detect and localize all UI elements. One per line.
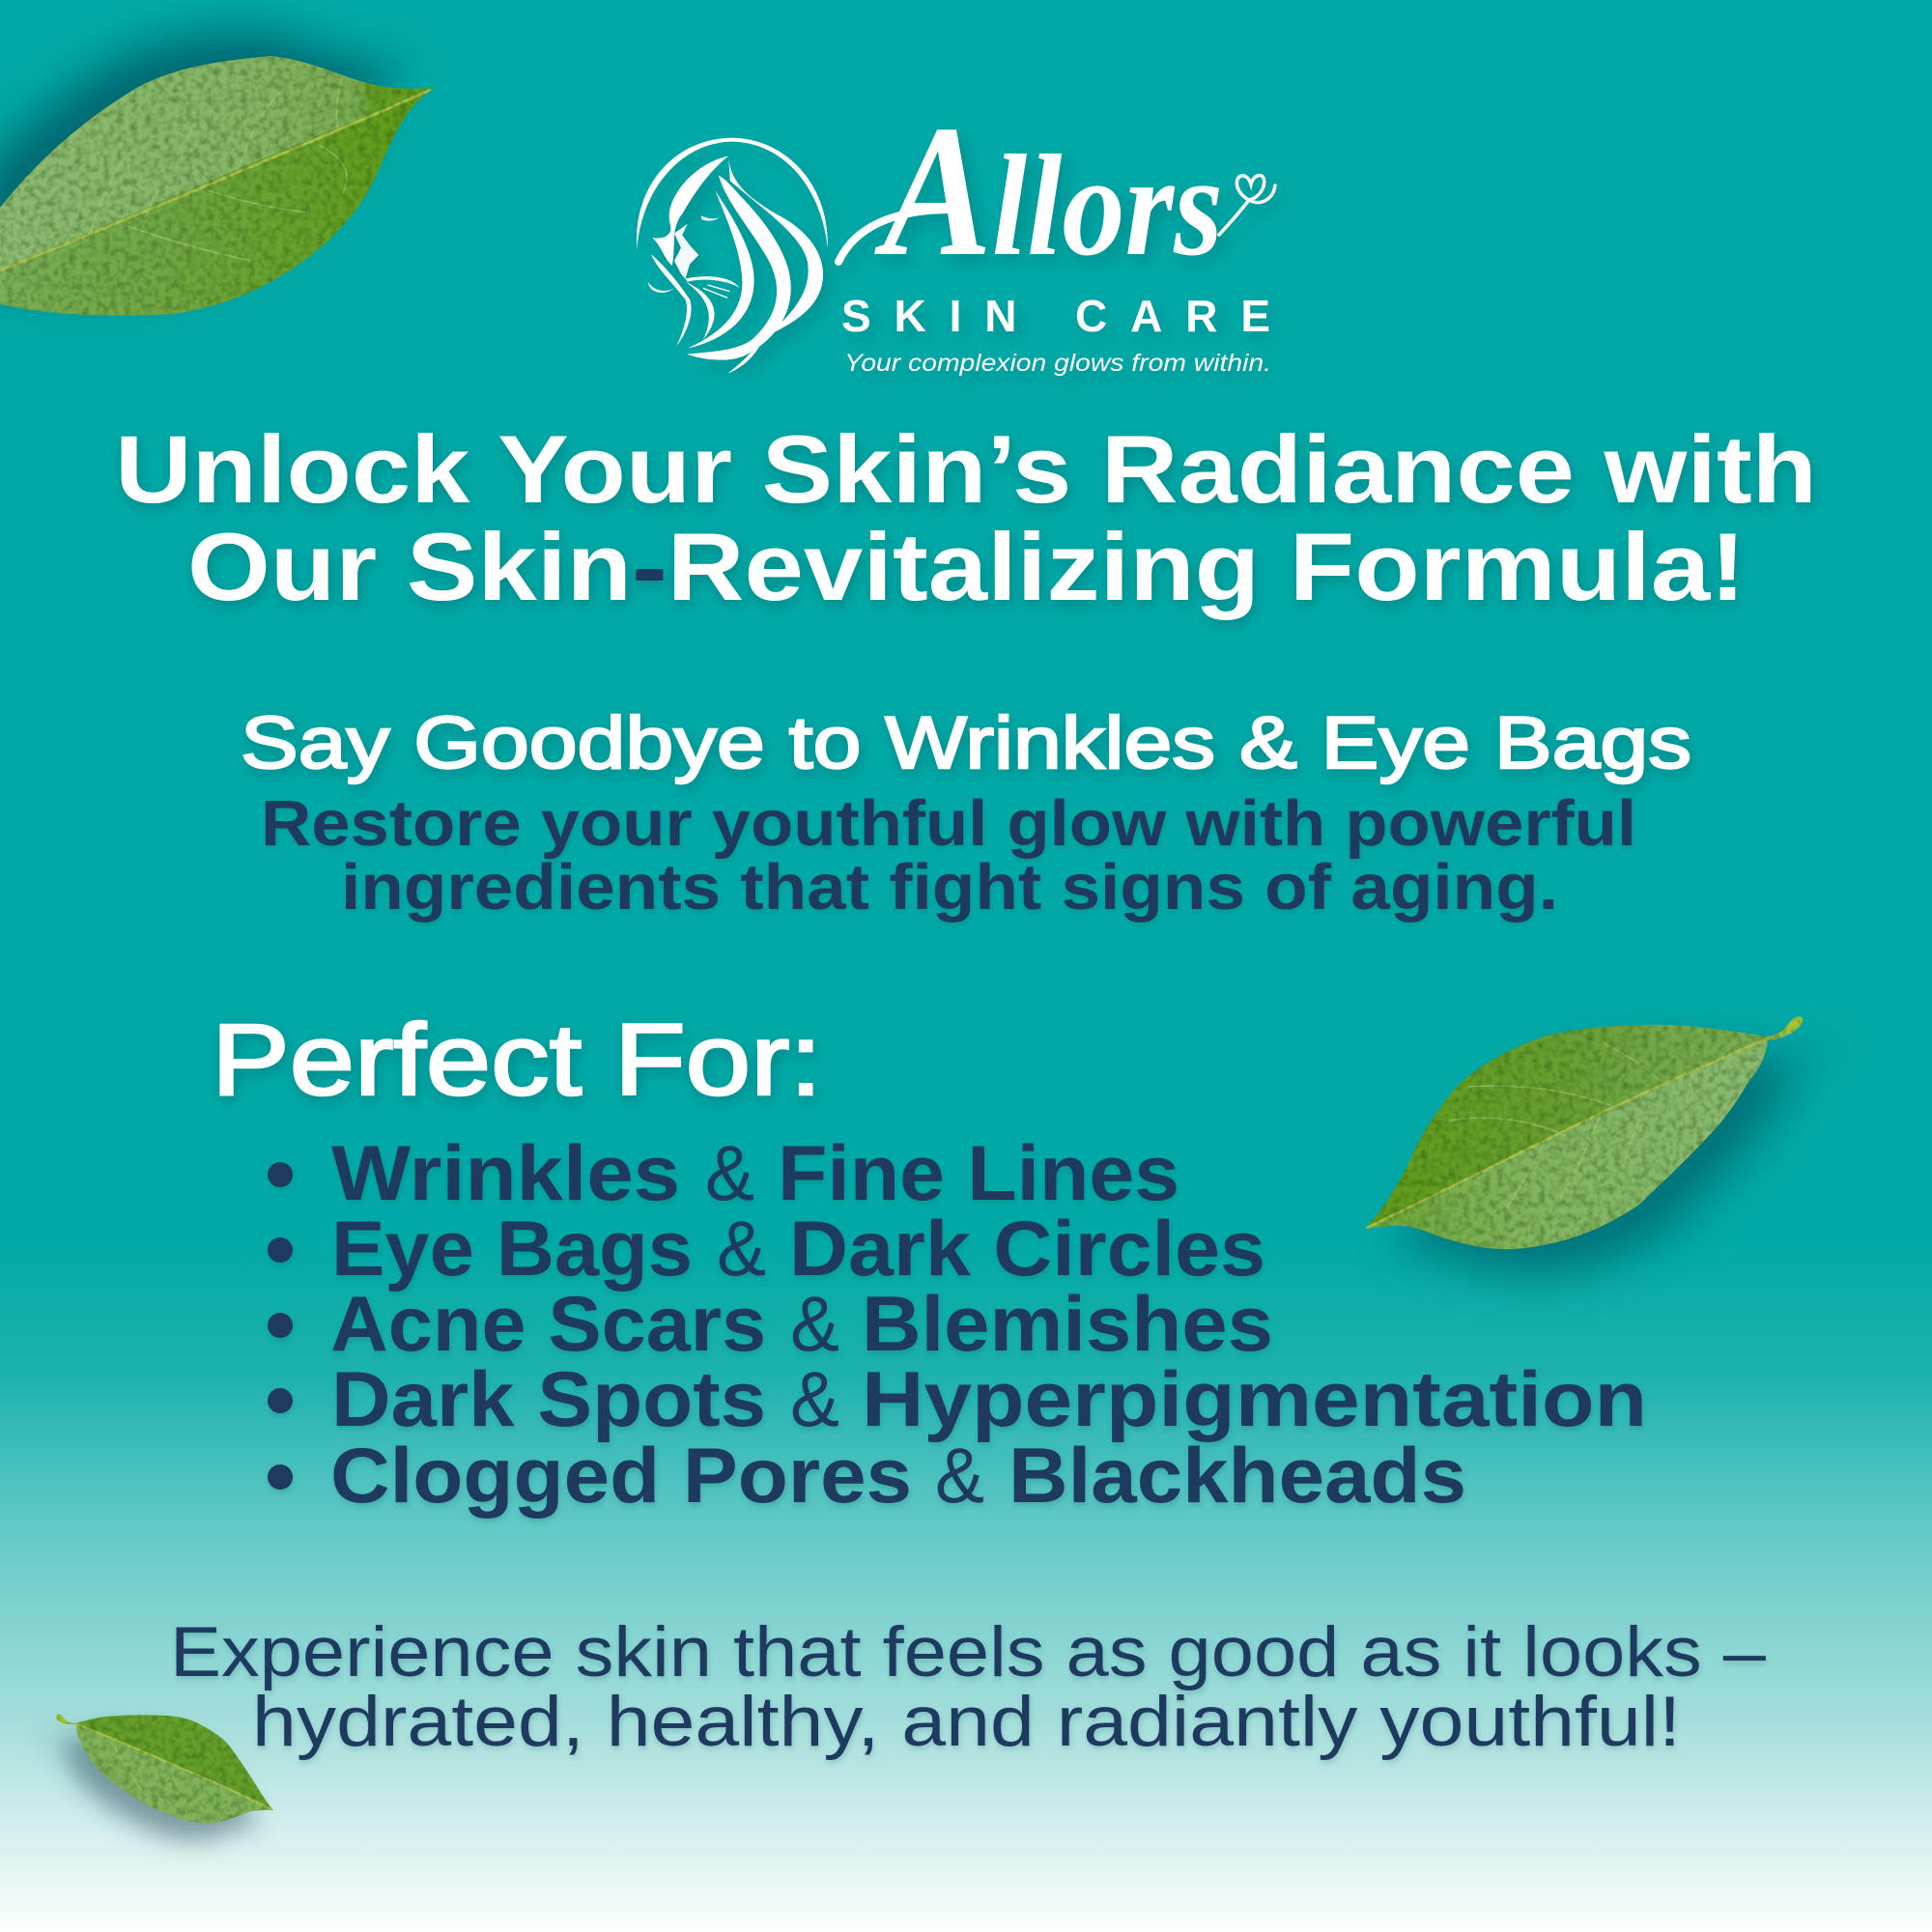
list item: wrinkles and fine lines: [268, 1130, 1179, 1217]
leaf: bottom left: [44, 1714, 273, 1857]
logo tagline: Your complexion glows from within.: [844, 350, 1271, 377]
list item: dark spots and hyperpigmentation: [268, 1356, 1647, 1443]
closing statement: hydrated, healthy, and radiantly youthful!: [252, 1683, 1681, 1761]
list item: eye bags and dark circles: Dark Circles: [789, 1206, 1265, 1293]
logo wordmark: Allors: Allors: [873, 87, 1223, 296]
intro text: Restore your youthful glow with powerful: [261, 787, 1636, 860]
list item: dark spots and hyperpigmentation: &: [790, 1356, 839, 1443]
logo emblem: woman with flowing hair: [637, 138, 828, 374]
closing statement: [170, 1613, 1766, 1761]
list item: eye bags and dark circles: Eye Bags: [331, 1206, 693, 1293]
title: [115, 415, 1817, 620]
heading: Perfect For: Perfect For:: [212, 1004, 822, 1117]
list item: clogged pores and blackheads: Blackheads: [1009, 1433, 1466, 1520]
list item: wrinkles and fine lines: &: [705, 1130, 754, 1217]
list item: eye bags and dark circles: [268, 1206, 1265, 1293]
logo text: SKIN CARE: SKIN CARE: [841, 291, 1270, 341]
list item: wrinkles and fine lines: Wrinkles: [331, 1130, 680, 1217]
logo swash and heart: [838, 175, 1275, 262]
title: Our Skin -Revitalizing Formula!: [187, 513, 1746, 620]
intro text: ingredients that fight signs of aging.: [341, 851, 1558, 923]
list item: acne scars and blemishes: Blemishes: [862, 1281, 1273, 1368]
list: perfect for: [268, 1130, 1647, 1520]
list item: eye bags and dark circles: &: [717, 1206, 766, 1293]
title: Unlock Your Skin’s Radiance with: [115, 415, 1817, 523]
list item: acne scars and blemishes: [268, 1281, 1273, 1368]
list item: acne scars and blemishes: &: [790, 1281, 839, 1368]
list item: dark spots and hyperpigmentation: Hyperpigmentation: [862, 1356, 1647, 1443]
logo: [637, 87, 1275, 377]
list item: clogged pores and blackheads: [268, 1433, 1466, 1520]
list item: acne scars and blemishes: Acne Scars: [330, 1281, 766, 1368]
list item: wrinkles and fine lines: Fine Lines: [778, 1130, 1179, 1217]
leaf: top left: [0, 0, 454, 328]
intro text: [261, 787, 1636, 923]
closing statement: Experience skin that feels as good as it looks –: [170, 1613, 1766, 1691]
subheading: Say Goodbye to Wrinkles & Eye Bags: [241, 702, 1691, 784]
list item: clogged pores and blackheads: Clogged Pores: [330, 1433, 912, 1520]
list item: dark spots and hyperpigmentation: Dark Spots: [331, 1356, 766, 1443]
leaf: right: [1352, 995, 1830, 1274]
list item: clogged pores and blackheads: &: [935, 1433, 984, 1520]
